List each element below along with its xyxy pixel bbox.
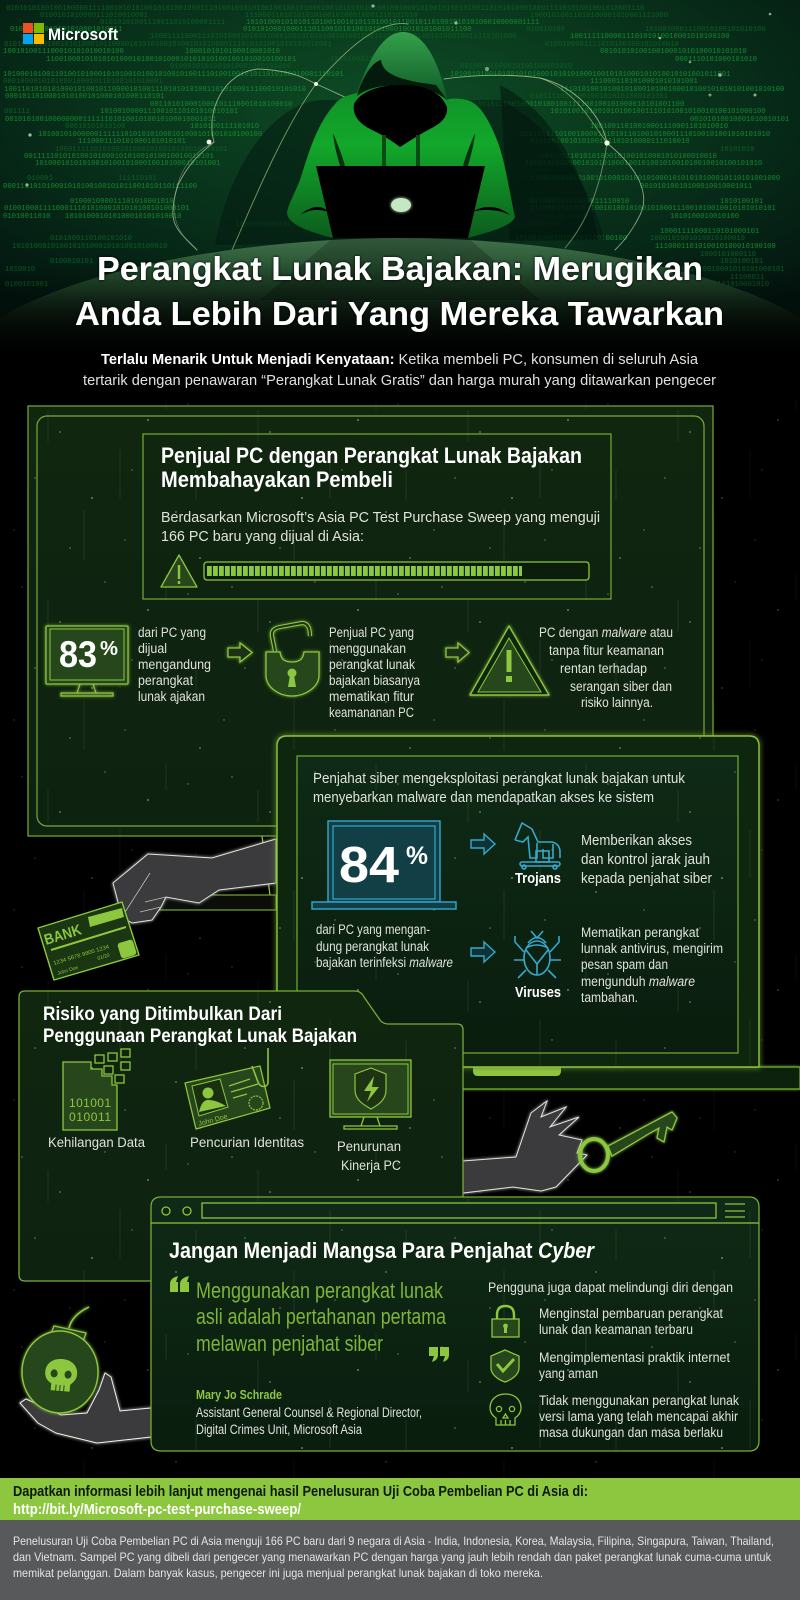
- icon: identity theft card: [185, 1048, 270, 1129]
- text: risks: PC dengan malware atau: [539, 625, 673, 640]
- icon: shield check: [491, 1350, 519, 1382]
- hero illustration: 0100101001: [5, 281, 48, 289]
- hero illustration: 0100010101001010001000101000: [170, 63, 291, 71]
- icon: open padlock: [266, 623, 319, 696]
- text: virus description: lunnak antivirus, mengirim: [581, 941, 723, 956]
- hero illustration: 1000111010001010: [700, 281, 769, 289]
- title: [75, 250, 724, 332]
- heading: Penggunaan Perangkat Lunak Bajakan: [43, 1026, 357, 1047]
- hero illustration: 0001000010101000100010110100101010001: [3, 78, 163, 86]
- text: risks: [539, 625, 673, 710]
- text: tip 1: lunak dan keamanan terbaru: [539, 1322, 693, 1337]
- text: tip 2: Mengimplementasi praktik internet: [539, 1350, 730, 1365]
- hero illustration: 01100010101000011110010: [530, 198, 629, 206]
- credit card: [38, 902, 139, 980]
- label: Trojans: Trojans: [515, 870, 561, 887]
- hero illustration: 0100100001111010100100101010010: [545, 41, 679, 49]
- arrow: [446, 643, 469, 662]
- quote: Menggunakan perangkat lunak: [196, 1278, 444, 1303]
- text: sellers disable security: perangkat lunak: [329, 657, 415, 672]
- skull: [44, 1358, 78, 1392]
- text: risks: tanpa fitur keamanan: [549, 643, 664, 658]
- text: 84 percent description: bajakan terinfeksi malware: [316, 955, 453, 970]
- hero illustration: 1110001101010101010010100010001110101010: [245, 12, 418, 20]
- quote: [170, 1276, 449, 1362]
- panel: risks folder: [19, 991, 463, 1281]
- hero illustration: 1110001101010010100010100100: [655, 243, 776, 251]
- hero illustration: 1010001010101001010010100010010100010101001: [35, 160, 220, 168]
- label: Penurunan: [337, 1139, 401, 1154]
- hero illustration: 1000101001010010100010: [650, 235, 745, 243]
- icon: identity theft card: John Doe: [198, 1113, 229, 1128]
- text: 83 percent description: dari PC yang: [138, 625, 206, 640]
- heading box: [143, 434, 611, 599]
- icon: monitor with 83 percent: [46, 626, 128, 696]
- hero illustration: 0010101010010010001010100010101010: [600, 48, 747, 56]
- icon: monitor with shield: [330, 1060, 411, 1129]
- attribution: [196, 1387, 422, 1437]
- bomb: [22, 1307, 98, 1413]
- laptop lid: [277, 736, 759, 1067]
- hero illustration: 1010010100000011111101010101000101000101001010100100: [38, 131, 262, 139]
- laptop base: [200, 1067, 800, 1089]
- hero illustration: 00101010010001010010101: [690, 116, 789, 124]
- logo: Microsoft: Microsoft: [48, 25, 118, 44]
- hero illustration: 01010101001110011010100001111: [100, 19, 225, 27]
- intro text: [83, 351, 716, 389]
- call to action banner: Dapatkan informasi lebih lanjut mengenai hasil Penelusuran Uji Coba Pembelian PC di Asia di:: [13, 1483, 588, 1500]
- laptop glow light: [391, 198, 411, 212]
- hero illustration: 10001111000110101000101: [660, 228, 759, 236]
- heading box: Penjual PC dengan Perangkat Lunak Bajakan: [161, 443, 582, 468]
- arrow: to trojans: [471, 834, 495, 854]
- label: Kehilangan Data: [48, 1135, 145, 1150]
- attribution: Mary Jo Schrade: [196, 1387, 282, 1402]
- hero illustration: 1010010001110010100101010100: [645, 26, 766, 34]
- label: [337, 1139, 401, 1173]
- hero illustration: 01011110101001001010101000101001: [530, 93, 668, 101]
- text: tip 1: [539, 1306, 723, 1337]
- key: [580, 1112, 677, 1171]
- text: 83 percent description: dijual: [138, 641, 167, 656]
- panel: monitor, pirated PC sellers: [28, 406, 713, 910]
- attribution: Assistant General Counsel & Regional Director,: [196, 1405, 422, 1420]
- hand holding credit card: [38, 839, 276, 980]
- text: virus description: Mematikan perangkat: [581, 925, 699, 940]
- hero illustration: 111000100101011001010010100101000111001010010010101010101: [530, 205, 776, 213]
- panel: browser, do not become prey: [151, 1197, 759, 1451]
- text: 83 percent description: perangkat: [138, 673, 193, 688]
- hero illustration: 11101010001: [515, 221, 562, 229]
- open quote mark: [170, 1276, 189, 1292]
- text: sellers disable security: bajakan biasanya: [329, 673, 420, 688]
- icon: blue laptop with 84 percent: 84: [339, 836, 400, 893]
- hero illustration: 0001001011100100010100100111100100101000010101001100: [460, 101, 684, 109]
- hero illustration: 1110001101010001010101001: [590, 78, 698, 86]
- hero illustration: 1100100010101010100010100101000101010101001001010010100101: [46, 56, 296, 64]
- icon: warning triangle small: [161, 555, 197, 587]
- heading box: Berdasarkan Microsoft’s Asia PC Test Purchase Sweep yang menguji: [161, 509, 600, 526]
- hand: [113, 839, 276, 923]
- icon: large warning triangle: [470, 626, 549, 695]
- text: sellers disable security: mematikan fitur: [329, 689, 414, 704]
- label: Viruses: Viruses: [515, 984, 561, 1001]
- hero illustration: 00010101010100: [65, 123, 125, 131]
- quote: melawan penjahat siber: [196, 1331, 383, 1356]
- intro text: tertarik dengan penawaran “Perangkat Lunak Gratis” dan harga murah yang ditawarkan pengecer: [83, 372, 716, 389]
- hero illustration: 10010011010010001110001101010010: [590, 123, 728, 131]
- hero illustration: 1010001010011010010100010101001010010100101001110100100101011010100010001110101: [3, 71, 344, 79]
- hero illustration: 0010101001000000001111110101001010010100010001011: [5, 116, 216, 124]
- hero illustration: 010010100: [526, 26, 565, 34]
- text: sellers disable security: Penjual PC yang: [329, 625, 414, 640]
- text: virus description: tambahan.: [581, 990, 638, 1005]
- icon: blue laptop with 84 percent: [312, 821, 456, 909]
- text: trojan description: kepada penjahat siber: [581, 870, 712, 887]
- hero illustration: 010001000011101010001010: [70, 198, 174, 206]
- label: Kinerja PC: [341, 1158, 401, 1173]
- hero illustration: 1000100100101: [235, 221, 291, 229]
- intro text: Penjahat siber mengeksploitasi perangkat lunak bajakan untuk: [313, 770, 685, 787]
- hero illustration: 01010100010001110110010101001010100010010101001011100: [243, 26, 472, 34]
- logo: Microsoft: [23, 23, 118, 44]
- text: 83 percent description: [138, 625, 211, 704]
- text: 84 percent description: dung perangkat lunak: [316, 939, 429, 954]
- hero illustration: 1110101001010010100010100100010100101010101001010100: [560, 86, 784, 94]
- hero illustration: 0100100011110001110101000101010100101000101: [4, 205, 189, 213]
- close quote mark: [429, 1347, 449, 1362]
- text: risks: rentan terhadap: [560, 661, 647, 676]
- hero illustration: 010001: [27, 175, 53, 183]
- hero illustration: 101010001010100010101010010: [65, 213, 181, 221]
- hero illustration: 1100101010101001010001010010100010101010100010110101001000: [530, 175, 780, 183]
- hero illustration: 1001101010101000101001011000010100111010101010011010100011100010101010: [4, 86, 306, 94]
- panel: laptop, malware: [200, 736, 800, 1089]
- icon: monitor with 83 percent: 83: [59, 634, 97, 675]
- title: Perangkat Lunak Bajakan: Merugikan: [97, 250, 703, 287]
- hero illustration: 1001010011100010101010010100: [3, 48, 124, 56]
- hero illustration: [0, 0, 800, 360]
- hero illustration: 1110001110101000101010101: [78, 138, 186, 146]
- heading: Risiko yang Ditimbulkan Dari: [43, 1004, 282, 1025]
- hero illustration: 10001010011010100001010001111000: [530, 12, 668, 20]
- text: sellers disable security: keamananan PC: [329, 705, 414, 720]
- arrow: [228, 643, 252, 662]
- icon: virus bug: [514, 931, 561, 978]
- text: tip 3: Tidak menggunakan perangkat lunak: [539, 1393, 739, 1408]
- hero illustration: 10101001010010101001001110101001010010100101000100: [550, 108, 766, 116]
- hero illustration: 0001011010001010100101000101000110101: [5, 93, 165, 101]
- heading box: Membahayakan Pembeli: [161, 467, 393, 492]
- hero illustration: 10100100010100001110100100: [515, 235, 627, 243]
- browser toolbar: [151, 1203, 759, 1223]
- text: risks: serangan siber dan: [570, 679, 672, 694]
- hero illustration: 1000111110101001010001010010100010010101: [55, 146, 228, 154]
- hand holding key: [463, 1101, 677, 1193]
- title: Anda Lebih Dari Yang Mereka Tawarkan: [75, 295, 724, 332]
- call to action banner: [0, 1478, 800, 1520]
- hero illustration: 1010010: [5, 266, 35, 274]
- hero illustration: 01010110010101010001010011: [10, 26, 122, 34]
- monitor stand: [145, 836, 276, 910]
- icon: blue laptop with 84 percent: %: [406, 842, 428, 870]
- arrow: to viruses: [471, 942, 495, 962]
- hero illustration: 000111101010001010100100101011001010110111100: [3, 183, 197, 191]
- credit card: 01/20: [97, 952, 111, 962]
- hero illustration: 1000111100011101010001010101000100101010100101001000101011100010010100010011110101000: [150, 33, 517, 41]
- footer note: [0, 1520, 800, 1600]
- hero illustration: 1001111100001110101010010001010100100: [570, 33, 730, 41]
- text: 84 percent description: [316, 922, 453, 970]
- heading: Jangan Menjadi Mangsa Para Penjahat Cyber: [169, 1238, 595, 1263]
- text: trojan description: dan kontrol jarak jauh: [581, 851, 710, 868]
- hero illustration: 01010011010: [3, 213, 50, 221]
- credit card: 1234 5678 9800 1234: [53, 944, 110, 967]
- hero illustration: 10010111010101000101001010001010100010010: [540, 153, 717, 161]
- hero illustration: 0010101010010001010010001010101000101: [625, 266, 785, 274]
- hero illustration: 001101010001000101110001010100010: [150, 101, 292, 109]
- monitor frame: [28, 406, 713, 836]
- footer note: memikat pelanggan. Dalam banyak kasus, pengecer ini juga menjual perangkat lunak bajakan di toko mereka.: [13, 1566, 543, 1580]
- icon: monitor with 83 percent: %: [100, 638, 118, 660]
- heading box: 166 PC baru yang dijual di Asia:: [161, 528, 364, 545]
- hero illustration: 101010001010010101000101010010100010: [12, 243, 167, 251]
- hero illustration: 001111: [4, 108, 30, 116]
- protection tips intro: Pengguna juga dapat melindungi diri dengan: [488, 1280, 733, 1295]
- text: sellers disable security: menggunakan: [329, 641, 406, 656]
- credit card: John Doe: [57, 965, 79, 977]
- hand: [463, 1101, 587, 1193]
- hand: [20, 1373, 151, 1443]
- text: tip 3: versi lama yang telah mencapai akhir: [539, 1409, 738, 1424]
- hero illustration: 1010100010010100: [670, 213, 739, 221]
- quote: asli adalah pertahanan pertama: [196, 1304, 446, 1329]
- hero illustration: 1010110100: [545, 213, 588, 221]
- text: 83 percent description: lunak ajakan: [138, 689, 205, 704]
- progress bar 83 percent: [204, 562, 589, 580]
- hero illustration: 00111110101010010100010101001010010010010101: [24, 153, 214, 161]
- icon: data loss: [63, 1049, 130, 1130]
- hero illustration: 0001110101000101010: [675, 56, 757, 64]
- label: Pencurian Identitas: [190, 1135, 304, 1150]
- hero illustration: 0100010101: [50, 258, 93, 266]
- intro text: [313, 770, 685, 806]
- hero illustration: 0101010100100100000111100101010100101010010001110100101010100100100101000100101010010100100100010100101001010011010101000100011110101001001010001110: [6, 5, 644, 13]
- text: 84 percent description: dari PC yang mengan-: [316, 922, 430, 937]
- hand holding bomb: [20, 1307, 151, 1443]
- icon: padlock: [492, 1306, 519, 1337]
- hero illustration: 0101011110100100001010101101001010001110100101001010101010: [520, 131, 770, 139]
- text: tip 2: yang aman: [539, 1366, 598, 1381]
- texture: dust on black: [0, 400, 800, 1480]
- credit card: BANK: [42, 921, 84, 949]
- hero illustration: 11100011: [730, 274, 765, 282]
- text: virus description: pesan spam dan: [581, 957, 668, 972]
- icon: trojan horse: [515, 823, 560, 869]
- hero illustration: 1010100101: [720, 198, 763, 206]
- hero illustration: 0100101010000111010010001: [40, 12, 148, 20]
- hero illustration: 00101010010100010010001011: [640, 183, 752, 191]
- icon: data loss: 101001: [69, 1096, 111, 1110]
- icon: data loss: 010011: [69, 1110, 111, 1124]
- attribution: Digital Crimes Unit, Microsoft Asia: [196, 1422, 362, 1437]
- text: 83 percent description: mengandung: [138, 657, 211, 672]
- hacker figure: [287, 32, 515, 238]
- text: sellers disable security: [329, 625, 420, 720]
- hero illustration: 00100101000010100100101010: [460, 63, 572, 71]
- text: tip 1: Menginstal pembaruan perangkat: [539, 1306, 723, 1321]
- hero illustration: 1000101000110: [700, 251, 756, 259]
- hero illustration: 0101001001010100101101010000111010010: [530, 138, 690, 146]
- text: tip 2: [539, 1350, 730, 1381]
- text: risks: risiko lainnya.: [581, 695, 653, 710]
- hero illustration: 10100101001010010101000101010100010010101000101010010101001011001: [450, 71, 730, 79]
- text: tip 3: masa dukungan dan masa berlaku: [539, 1425, 723, 1440]
- heading: [43, 1004, 357, 1047]
- hero illustration: 1010100011010: [330, 56, 386, 64]
- hero illustration: 0101000110100101010: [50, 235, 132, 243]
- hero illustration: 10101000101010110100100101011010010110010110100101010100010000001111: [246, 19, 539, 27]
- intro text: menyebarkan malware dan mendapatkan akses ke sistem: [313, 789, 654, 806]
- text: virus description: [581, 925, 723, 1005]
- call to action banner: http://bit.ly/Microsoft-pc-test-purchase-sweep/: [13, 1501, 302, 1518]
- text: trojan description: Memberikan akses: [581, 832, 692, 849]
- hero illustration: 111110101: [118, 175, 157, 183]
- hero illustration: 10100100001110010110101010010101: [100, 108, 238, 116]
- hero illustration: 10101010: [720, 146, 755, 154]
- icon: skull outline: [490, 1394, 521, 1425]
- hero illustration: 0101000110100101010001011000010101010010100101010000111010101001010101010001: [4, 41, 332, 49]
- intro text: Terlalu Menarik Untuk Menjadi Kenyataan: Ketika membeli PC, konsumen di seluruh Asia: [101, 351, 699, 368]
- text: trojan description: [581, 832, 712, 887]
- hero illustration: 1010100101: [720, 258, 763, 266]
- hero illustration: 1000101010100010001010: [185, 48, 280, 56]
- hero illustration: 1010100111101010: [190, 123, 259, 131]
- text: virus description: mengunduh malware: [581, 974, 695, 989]
- text: tip 3: [539, 1393, 739, 1440]
- hero illustration: 1000101010000101010100010010100101001010010010100101010: [525, 160, 762, 168]
